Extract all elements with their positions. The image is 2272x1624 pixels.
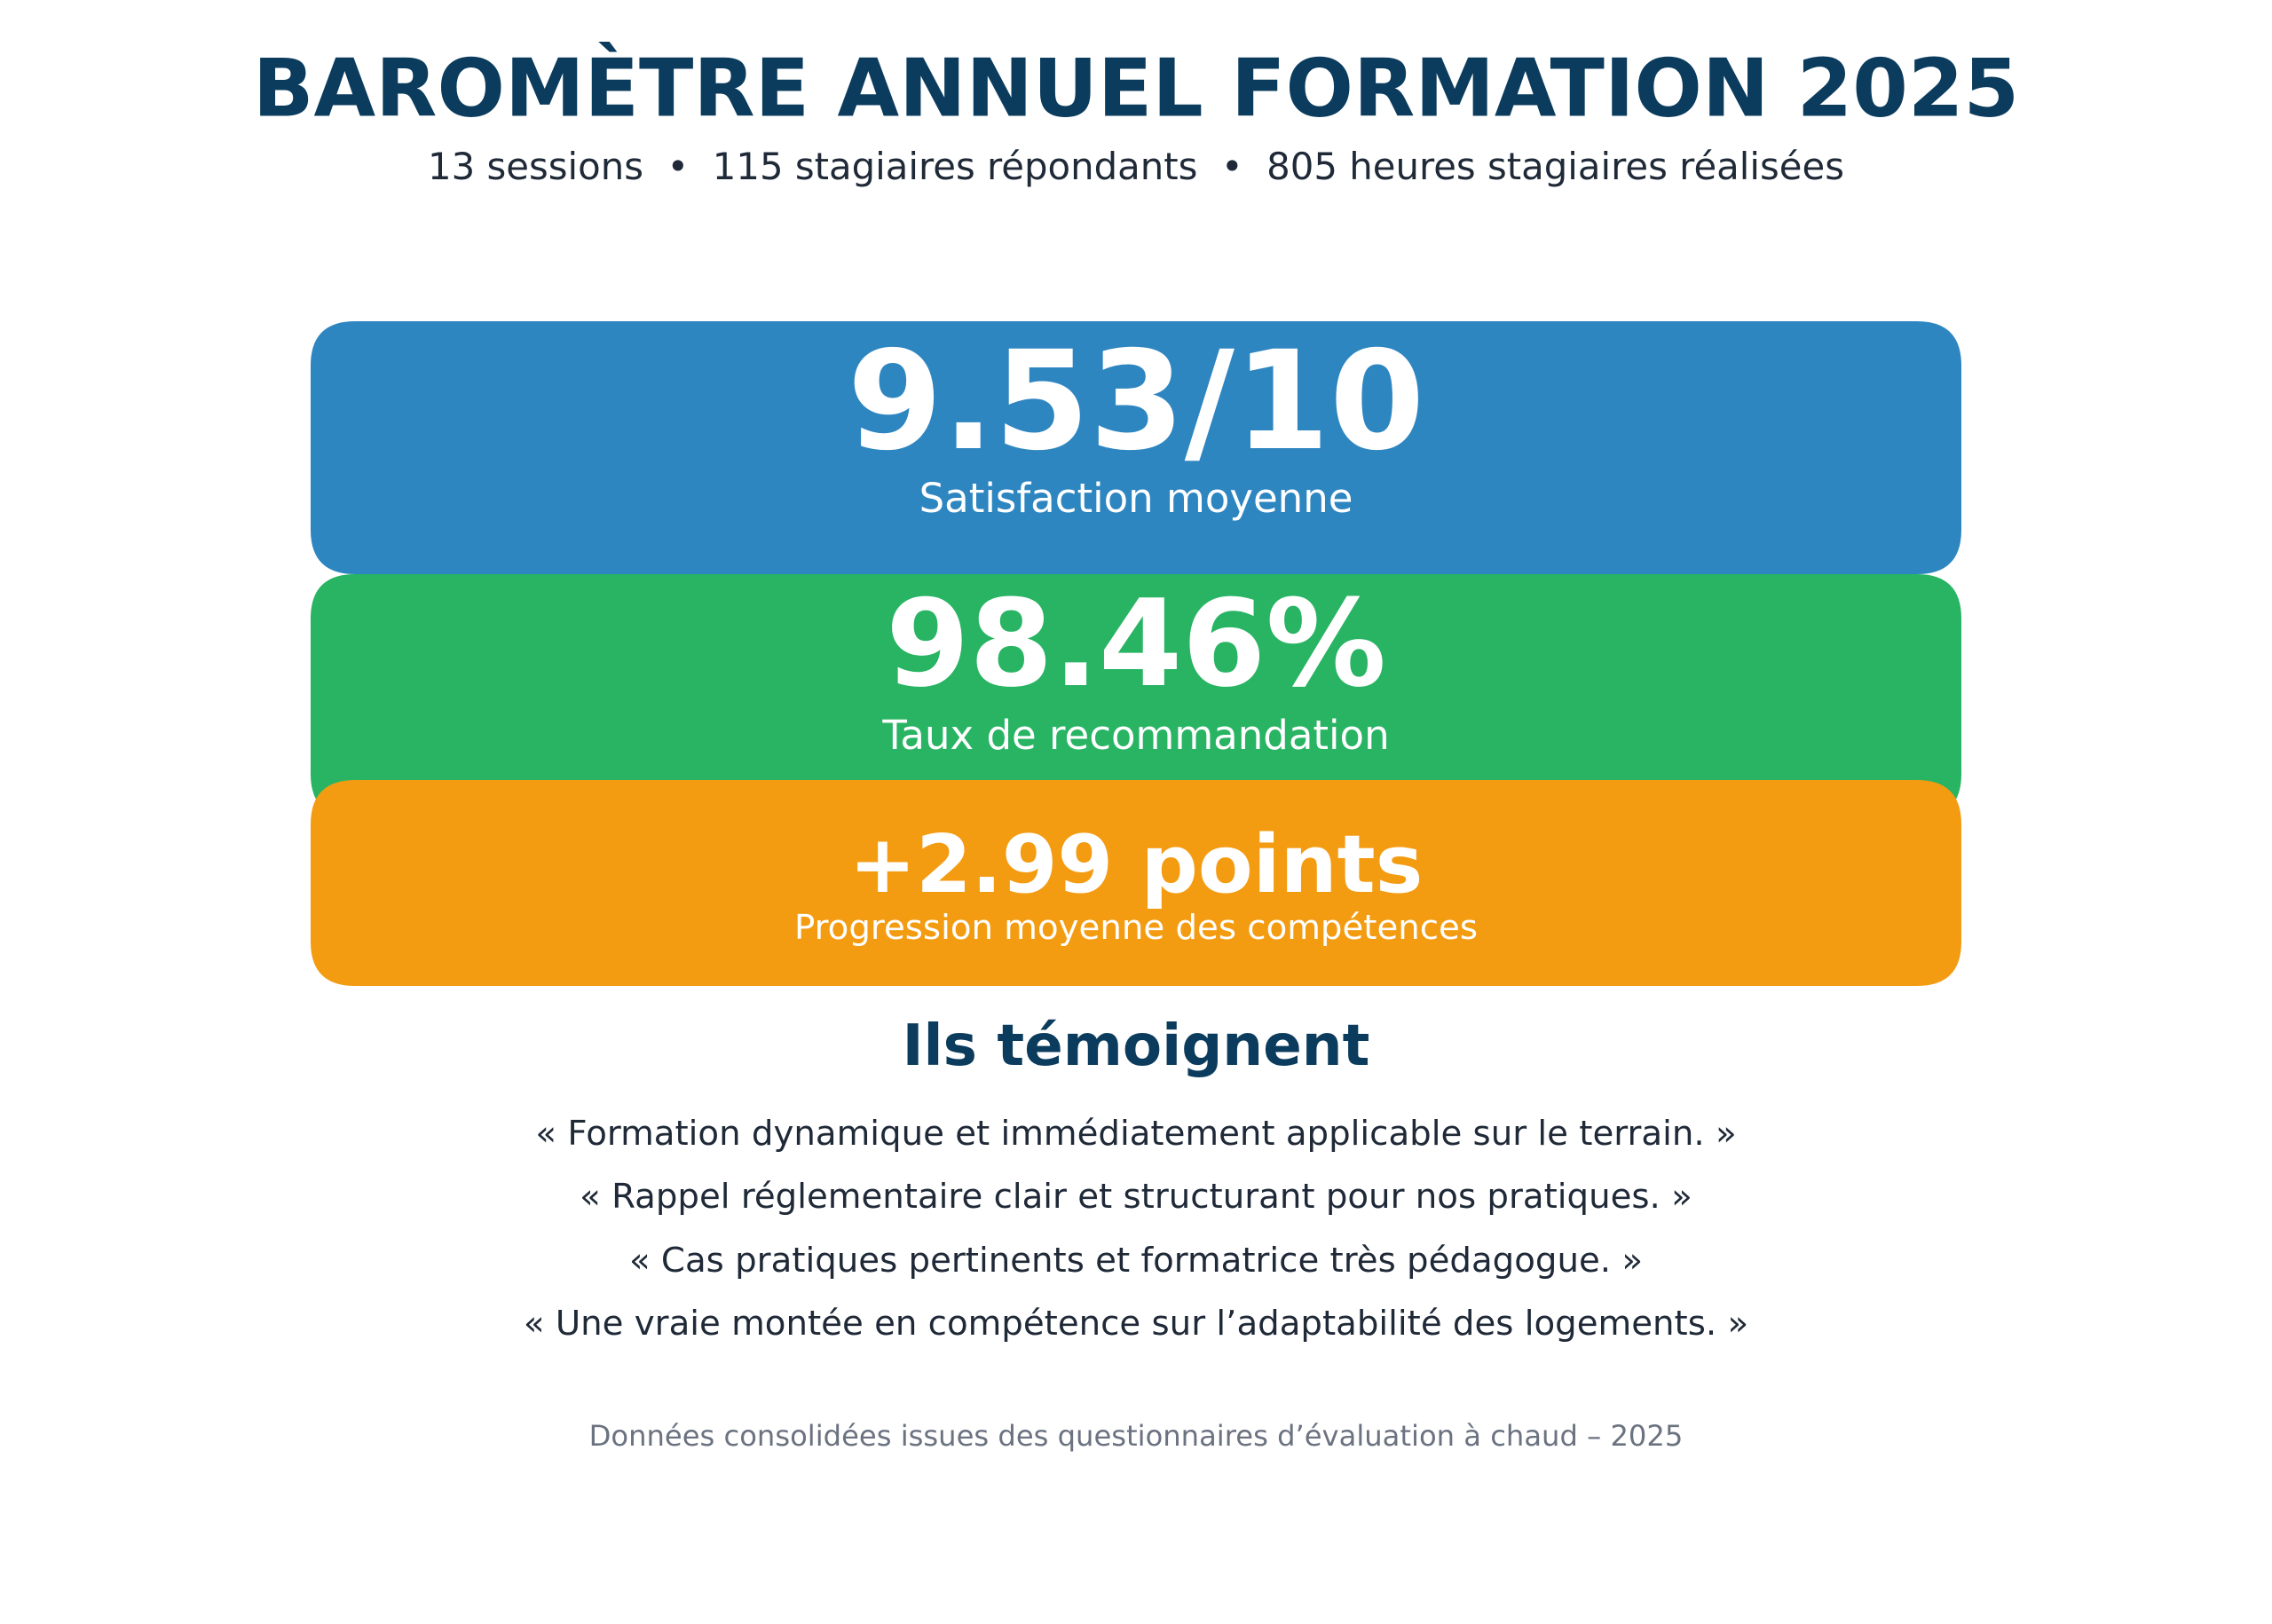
panel: satisfaction xyxy=(311,321,1961,574)
panel: recommendation xyxy=(311,573,1961,818)
quote 1: « Formation dynamique et immédiatement applicable sur le terrain. » xyxy=(535,1114,1737,1154)
card background: satisfaction xyxy=(311,321,1961,574)
label: progression: Progression moyenne des compétences xyxy=(794,908,1478,948)
figure: satisfaction: 9.53/10 xyxy=(848,322,1424,481)
card background: recommendation xyxy=(311,574,1961,818)
label: satisfaction: Satisfaction moyenne xyxy=(919,475,1353,522)
testimonials text block xyxy=(524,1114,1748,1344)
quote 4: « Une vraie montée en compétence sur l’adaptabilité des logements. » xyxy=(524,1304,1748,1344)
card background: progression xyxy=(311,780,1961,986)
figure: recommendation: 98.46% xyxy=(886,573,1386,713)
title: BAROMÈTRE ANNUEL FORMATION 2025 xyxy=(253,41,2019,135)
subtitle: 13 sessions • 115 stagiaires répondants • 805 heures stagiaires réalisées xyxy=(428,145,1844,188)
heading: testimonials: Ils témoignent xyxy=(903,1013,1369,1079)
quote 2: « Rappel réglementaire clair et structurant pour nos pratiques. » xyxy=(580,1177,1692,1217)
label: recommendation: Taux de recommandation xyxy=(881,712,1390,759)
figure: progression: +2.99 points xyxy=(849,818,1423,911)
panel: progression xyxy=(311,780,1961,986)
footer note: Données consolidées issues des questionnaires d’évaluation à chaud – 2025 xyxy=(589,1419,1683,1453)
quote 3: « Cas pratiques pertinents et formatrice très pédagogue. » xyxy=(629,1241,1643,1281)
